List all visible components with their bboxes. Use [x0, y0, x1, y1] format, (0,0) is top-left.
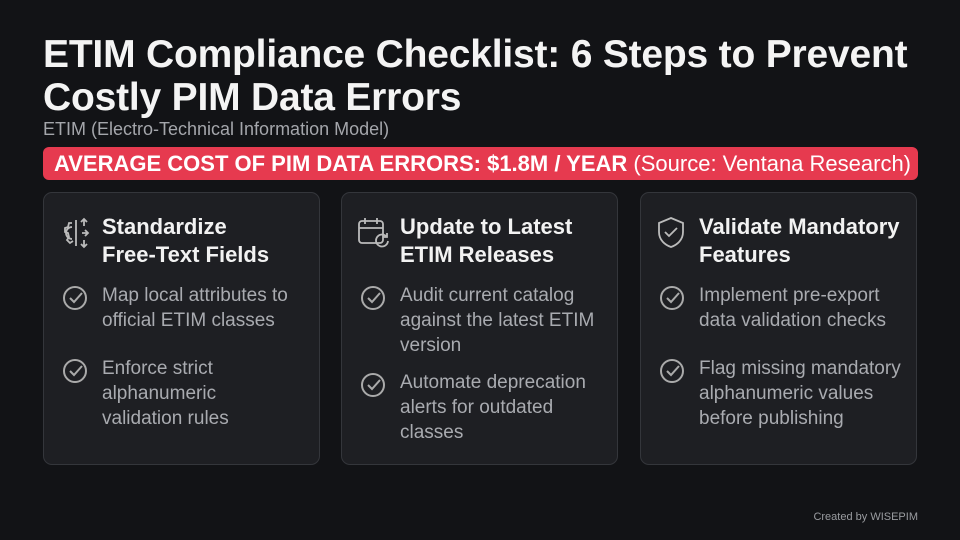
- item: [63, 358, 229, 429]
- title: Costly PIM Data Errors: [43, 76, 461, 119]
- item: [63, 285, 288, 331]
- subtitle: ETIM (Electro-Technical Information Model): [43, 119, 389, 139]
- item: [660, 285, 886, 331]
- panel: update: ETIM Releases: [400, 242, 554, 267]
- credit: Created by WISEPIM: [813, 511, 918, 523]
- panel: validate: Flag missing mandatory alphanumeric values before publishing: [699, 358, 901, 429]
- heading: validate: [658, 214, 900, 267]
- panel: standardize: Standardize: [102, 214, 227, 239]
- panel: validate: [640, 192, 917, 465]
- panel: standardize: Free-Text Fields: [102, 242, 269, 267]
- panel: standardize: validation rules: [102, 408, 229, 429]
- panel: update: Audit current catalog against the latest ETIM version: [400, 285, 594, 356]
- panel: standardize: alphanumeric: [102, 383, 216, 404]
- panel: validate: Implement pre-export data validation checks: [699, 285, 886, 331]
- panel: validate: Features: [699, 242, 791, 267]
- panel: update: Automate deprecation alerts for outdated classes: [400, 372, 586, 443]
- panel: standardize: [43, 192, 320, 465]
- panel: standardize: Map local attributes to official ETIM classes: [102, 285, 288, 331]
- panel: validate: Validate Mandatory: [699, 214, 900, 239]
- banner: cost callout: AVERAGE COST OF PIM DATA ERRORS: $1.8M / YEAR (Source: Ventana Research): [54, 151, 911, 176]
- item: [660, 358, 901, 429]
- heading: update: [358, 214, 572, 267]
- item: [361, 372, 586, 443]
- panel: standardize: Enforce strict: [102, 358, 213, 379]
- title: [43, 33, 908, 119]
- panel: update: [341, 192, 618, 465]
- panel: update: Update to Latest: [400, 214, 572, 239]
- item: [361, 285, 594, 356]
- title: ETIM Compliance Checklist: 6 Steps to Prevent: [43, 33, 907, 76]
- heading: standardize: [64, 214, 269, 267]
